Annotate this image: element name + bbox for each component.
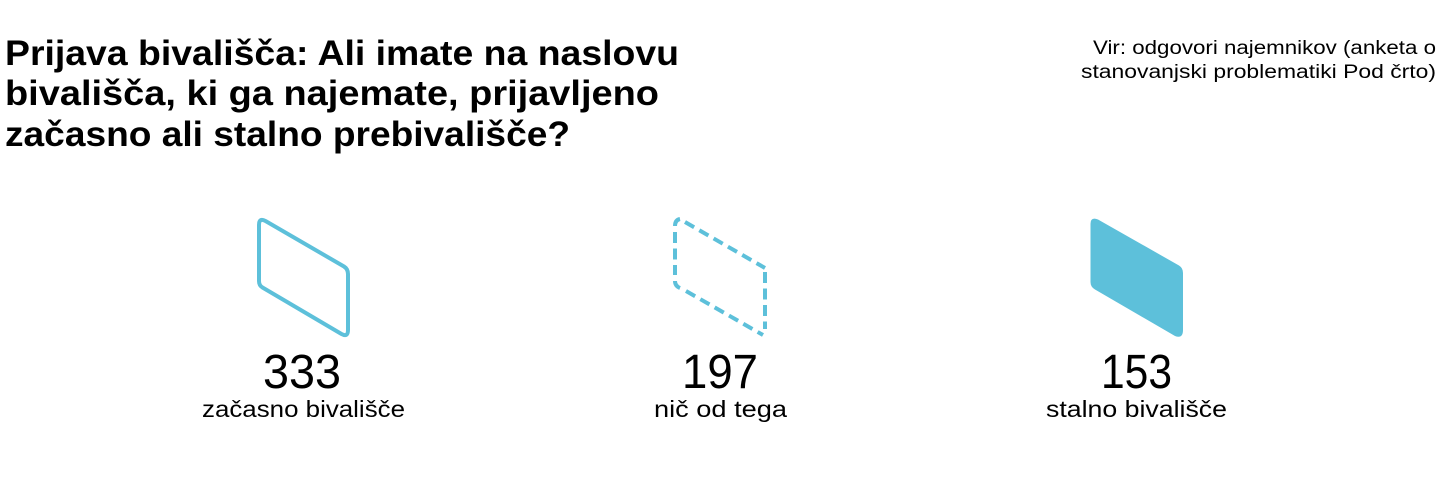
item: nič od tega xyxy=(654,219,787,422)
title: začasno ali stalno prebivališče? xyxy=(5,115,570,154)
source note: stanovanjski problematiki Pod črto) xyxy=(1081,62,1436,83)
value: 153: 153 xyxy=(1101,346,1172,399)
title: bivališča, ki ga najemate, prijavljeno xyxy=(5,74,659,113)
source note xyxy=(1081,38,1436,83)
source note: Vir: odgovori najemnikov (anketa o xyxy=(1093,38,1436,59)
icon: filled parallelogram xyxy=(1090,219,1183,337)
value: 197: 197 xyxy=(682,346,758,399)
value: 333: 333 xyxy=(263,346,341,399)
icon: dashed parallelogram xyxy=(675,219,765,335)
label: stalno bivališče: stalno bivališče xyxy=(1046,396,1227,422)
title xyxy=(5,34,679,154)
item: stalno bivališče xyxy=(1046,219,1227,422)
title: Prijava bivališča: Ali imate na naslovu xyxy=(5,34,679,73)
label: nič od tega: nič od tega xyxy=(654,396,787,422)
icon: outlined parallelogram xyxy=(259,220,348,335)
label: začasno bivališče: začasno bivališče xyxy=(202,396,405,422)
item: začasno bivališče xyxy=(202,220,405,422)
